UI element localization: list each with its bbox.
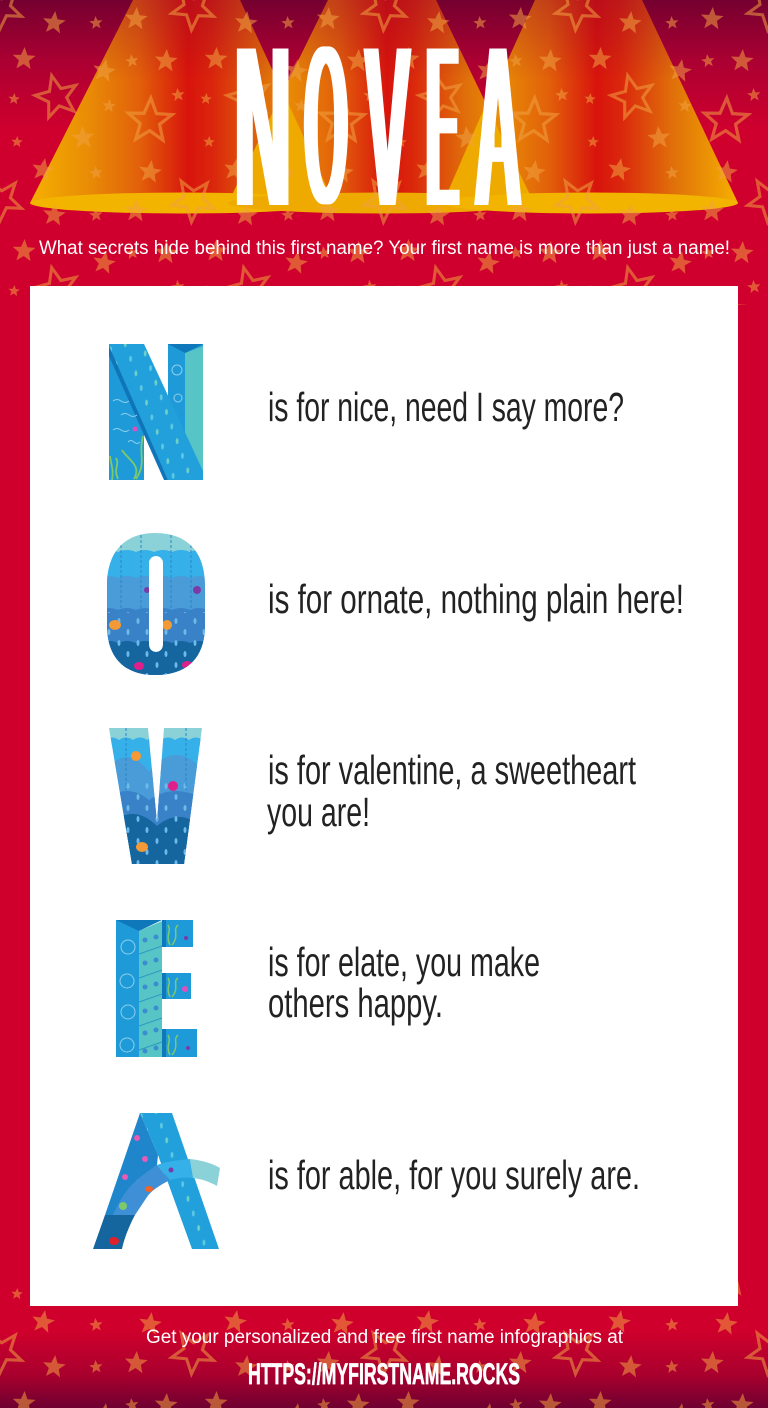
text: letter E meaning: others happy. bbox=[268, 980, 443, 1026]
text: letter V meaning bbox=[267, 747, 636, 835]
letter tile A bbox=[93, 1113, 220, 1249]
text: letter N meaning: is for nice, need I say more? bbox=[268, 384, 624, 430]
spotlight cone middle bbox=[228, 0, 534, 203]
footer url: HTTPS://MYFIRSTNAME.ROCKS bbox=[248, 1358, 520, 1391]
letter tile V bbox=[105, 726, 205, 866]
title bbox=[235, 0, 522, 263]
letter tile E bbox=[116, 920, 197, 1057]
panel: white letters panel bbox=[30, 286, 738, 1306]
cone overlap left bbox=[228, 92, 334, 203]
text: letter V meaning: you are! bbox=[267, 789, 370, 835]
letter tile N bbox=[109, 344, 203, 480]
text: letter E meaning: is for elate, you make bbox=[268, 939, 540, 985]
spotlights bbox=[30, 0, 738, 214]
star pattern top bbox=[0, 0, 768, 305]
spotlight pools bbox=[30, 192, 738, 214]
cone overlap right bbox=[443, 104, 534, 203]
text: letter E meaning bbox=[268, 939, 540, 1026]
letter tile O bbox=[107, 533, 205, 675]
spotlight cone right bbox=[443, 0, 738, 203]
spotlight cone left bbox=[30, 0, 334, 203]
star pattern bottom bbox=[0, 1280, 768, 1408]
footer call to action: Get your personalized and free first name infographics at bbox=[146, 1327, 624, 1348]
subtitle: What secrets hide behind this first name? Your first name is more than just a name! bbox=[39, 238, 730, 259]
